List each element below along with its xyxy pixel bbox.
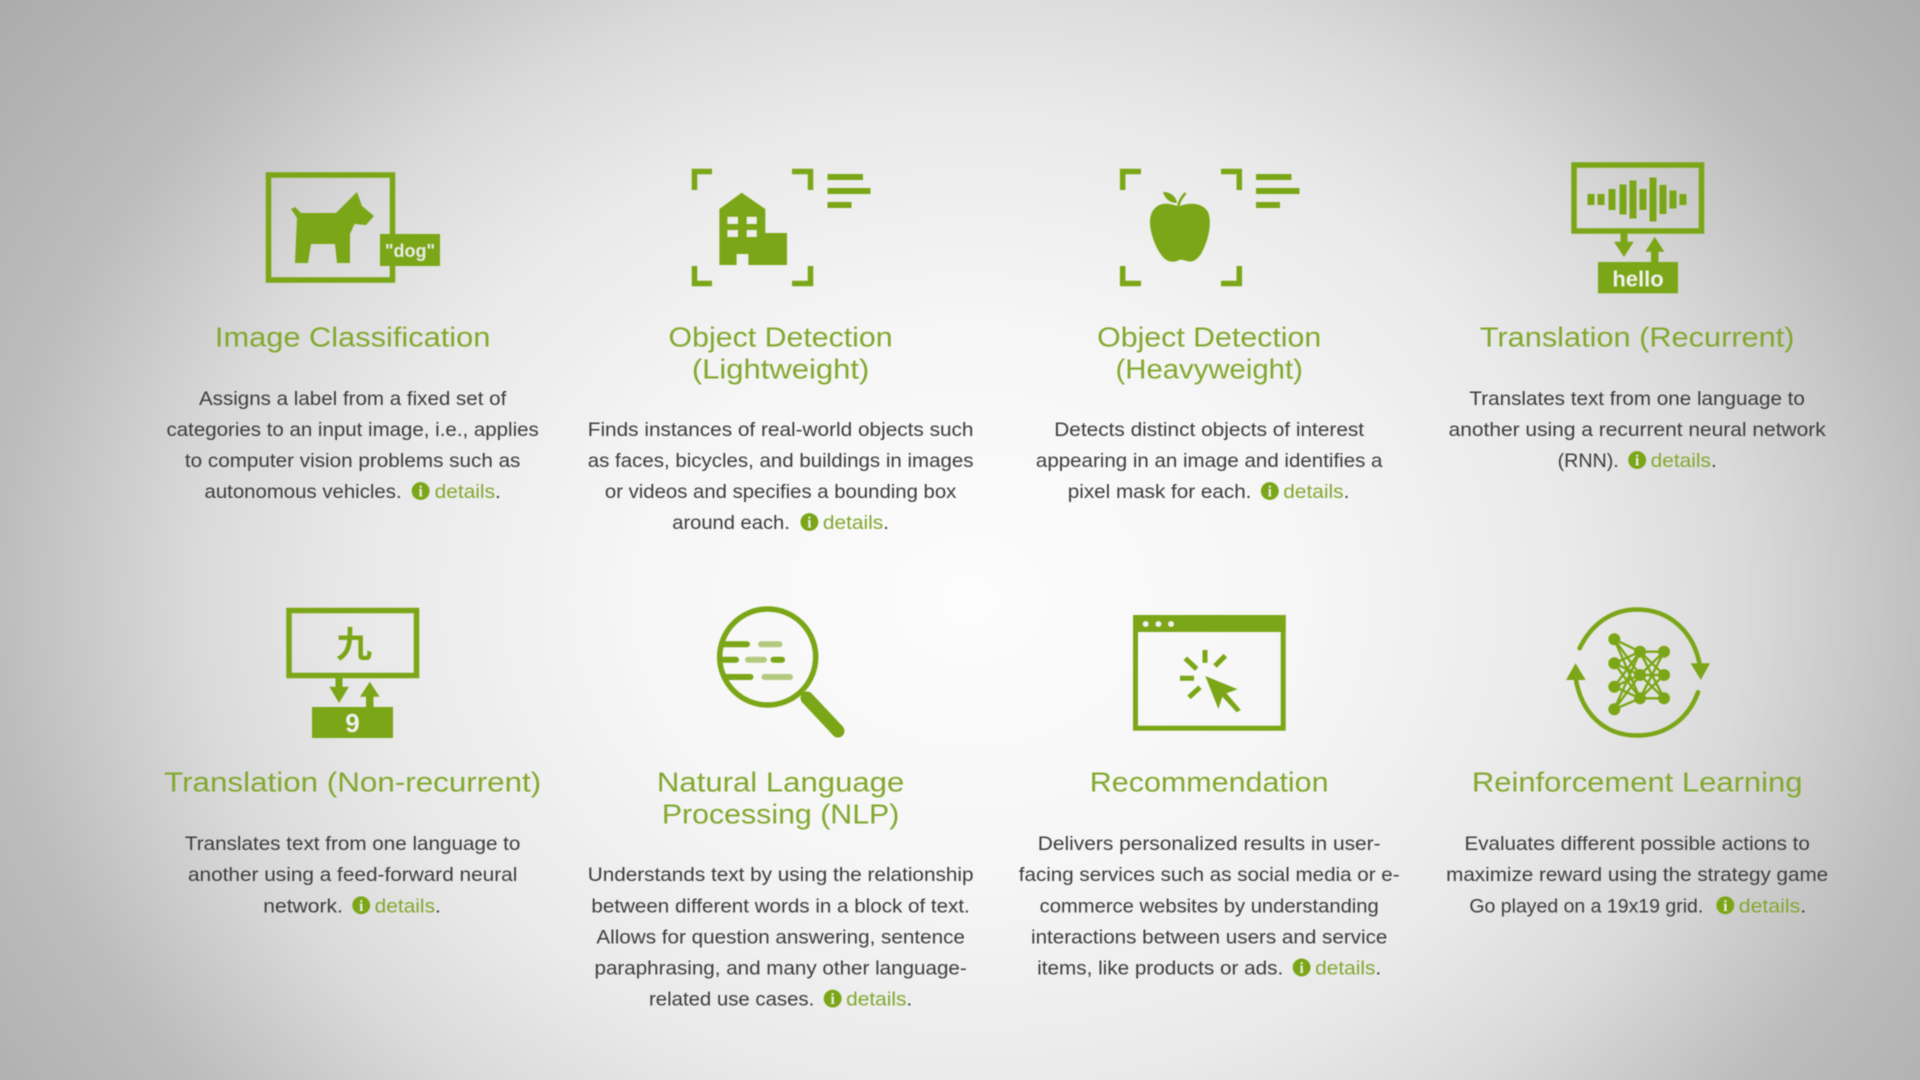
details link: details. (375, 895, 441, 917)
description (588, 419, 974, 534)
description: to computer vision problems such as (185, 450, 521, 472)
description: Assigns a label from a fixed set of (199, 388, 507, 410)
description: categories to an input image, i.e., applies (167, 419, 539, 441)
panel: natural language processing (588, 609, 974, 1011)
description (588, 864, 974, 1011)
description: as faces, bicycles, and buildings in images (588, 450, 974, 472)
description: between different words in a block of text. (591, 895, 970, 917)
panel: object detection heavyweight (1036, 172, 1383, 503)
description: facing services such as social media or e- (1019, 864, 1400, 886)
details link: i (1268, 484, 1273, 501)
description (1019, 833, 1400, 979)
title: Processing (NLP) (662, 798, 899, 829)
panel: image classification (167, 175, 539, 503)
description: Detects distinct objects of interest (1054, 419, 1365, 441)
description: paraphrasing, and many other language- (594, 957, 967, 979)
description: Translates text from one language to (185, 833, 521, 855)
description (167, 388, 539, 503)
title: Translation (Recurrent) (1480, 322, 1795, 353)
description: or videos and specifies a bounding box (605, 481, 957, 503)
details link: details. (823, 512, 889, 534)
description: around each. (672, 512, 790, 534)
description (1449, 388, 1826, 472)
title: Object Detection (1097, 322, 1321, 353)
title: Natural Language (657, 767, 904, 798)
panel: object detection lightweight (588, 172, 974, 534)
icon: waveform monitor to hello (1574, 165, 1702, 293)
icon: dog picture with label (268, 175, 440, 280)
icon: magnifier over text (720, 609, 838, 731)
description: (RNN). (1558, 450, 1619, 472)
description: Understands text by using the relationship (588, 864, 974, 886)
description: another using a recurrent neural network (1449, 419, 1826, 441)
icon: character monitor to number: 九 (336, 624, 372, 665)
grid of workload panels (164, 165, 1828, 1011)
description: Evaluates different possible actions to (1465, 833, 1810, 855)
details link: i (1300, 960, 1305, 977)
details link: i (831, 991, 836, 1008)
description: interactions between users and service (1031, 926, 1387, 948)
details link: details. (1651, 450, 1717, 472)
details link: details. (435, 481, 501, 503)
description: Translates text from one language to (1469, 388, 1805, 410)
details link: details. (846, 989, 912, 1011)
icon: browser window with cursor (1133, 615, 1286, 728)
description: maximize reward using the strategy game (1446, 864, 1828, 886)
description: Go played on a 19x19 grid. (1469, 895, 1703, 917)
icon: waveform monitor to hello: hello (1612, 266, 1664, 292)
icon: apple in detection frame (1123, 172, 1300, 284)
description: another using a feed-forward neural (188, 864, 517, 886)
panel: recommendation (1019, 615, 1400, 979)
description: appearing in an image and identifies a (1036, 450, 1383, 472)
description: network. (263, 895, 343, 917)
details link: i (359, 898, 364, 915)
details link: i (807, 515, 812, 532)
description: related use cases. (649, 989, 814, 1011)
description (1036, 419, 1383, 503)
title: Image Classification (215, 322, 490, 353)
description: commerce websites by understanding (1040, 895, 1379, 917)
title (669, 322, 893, 384)
details link: details. (1283, 481, 1349, 503)
title: Translation (Non-recurrent) (164, 767, 541, 798)
description: pixel mask for each. (1068, 481, 1251, 503)
icon: dog picture with label: "dog" (385, 241, 435, 261)
icon: neural network with cycle arrows (1566, 610, 1710, 736)
title: (Lightweight) (692, 353, 869, 384)
title (1097, 322, 1321, 384)
details link: details. (1315, 957, 1381, 979)
panel: translation non-recurrent (164, 610, 541, 917)
description: Allows for question answering, sentence (596, 926, 965, 948)
description: Delivers personalized results in user- (1038, 833, 1381, 855)
description: items, like products or ads. (1037, 957, 1283, 979)
title: Recommendation (1090, 767, 1329, 798)
description: autonomous vehicles. (204, 481, 402, 503)
title: Reinforcement Learning (1472, 767, 1802, 798)
title (657, 767, 904, 829)
icon: character monitor to number: 9 (345, 708, 360, 738)
details link: i (1635, 453, 1640, 470)
icon: character monitor to number (289, 610, 416, 738)
panel: reinforcement learning (1446, 610, 1828, 917)
description (1446, 833, 1828, 917)
details link: i (1723, 898, 1728, 915)
panel: translation recurrent (1449, 165, 1826, 472)
description: Finds instances of real-world objects such (588, 419, 973, 441)
title: Object Detection (669, 322, 893, 353)
details link: details . (1739, 895, 1806, 917)
description (185, 833, 521, 917)
title: (Heavyweight) (1116, 353, 1303, 384)
icon: building in detection frame (694, 172, 870, 284)
details link: i (418, 484, 423, 501)
